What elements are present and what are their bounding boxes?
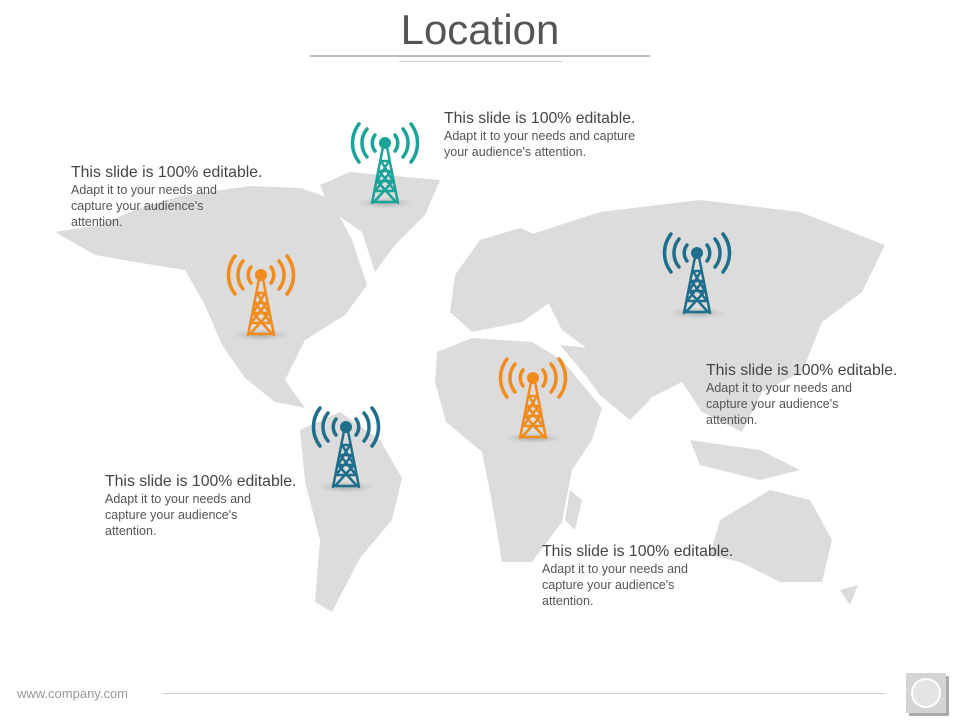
icon: footer button — [906, 673, 946, 713]
tower: greenland — [352, 124, 418, 209]
text: right: Adapt it to your needs and capture your audience's attention. — [706, 381, 852, 427]
text: top center: Adapt it to your needs and capture your audience's attention. — [444, 129, 635, 159]
text: top center: This slide is 100% editable. — [444, 110, 635, 127]
greenland — [320, 172, 440, 272]
text: bottom left: This slide is 100% editable. — [105, 473, 296, 490]
australia — [710, 490, 832, 582]
arabia / india — [560, 345, 650, 420]
europe — [450, 228, 565, 332]
tower: africa — [500, 359, 566, 444]
tower: south america — [313, 408, 379, 493]
text: bottom left — [105, 473, 296, 538]
text: top center — [444, 110, 635, 159]
text: top left: This slide is 100% editable. — [71, 164, 262, 181]
islands — [690, 440, 800, 480]
text: bottom left: Adapt it to your needs and capture your audience's attention. — [105, 492, 251, 538]
south america — [300, 412, 402, 612]
asia — [520, 200, 885, 432]
text: bottom center — [542, 543, 733, 608]
footer: www.company.com — [17, 686, 128, 701]
north america — [55, 186, 367, 408]
tower: north america — [228, 256, 294, 341]
tower: asia — [664, 234, 730, 319]
text: right: This slide is 100% editable. — [706, 362, 897, 379]
title: Location — [401, 6, 559, 53]
text: top left — [71, 164, 262, 229]
africa — [435, 338, 602, 562]
text: right — [706, 362, 897, 427]
text: bottom center: This slide is 100% editable. — [542, 543, 733, 560]
text: bottom center: Adapt it to your needs and capture your audience's attention. — [542, 562, 688, 608]
text: top left: Adapt it to your needs and capture your audience's attention. — [71, 183, 217, 229]
